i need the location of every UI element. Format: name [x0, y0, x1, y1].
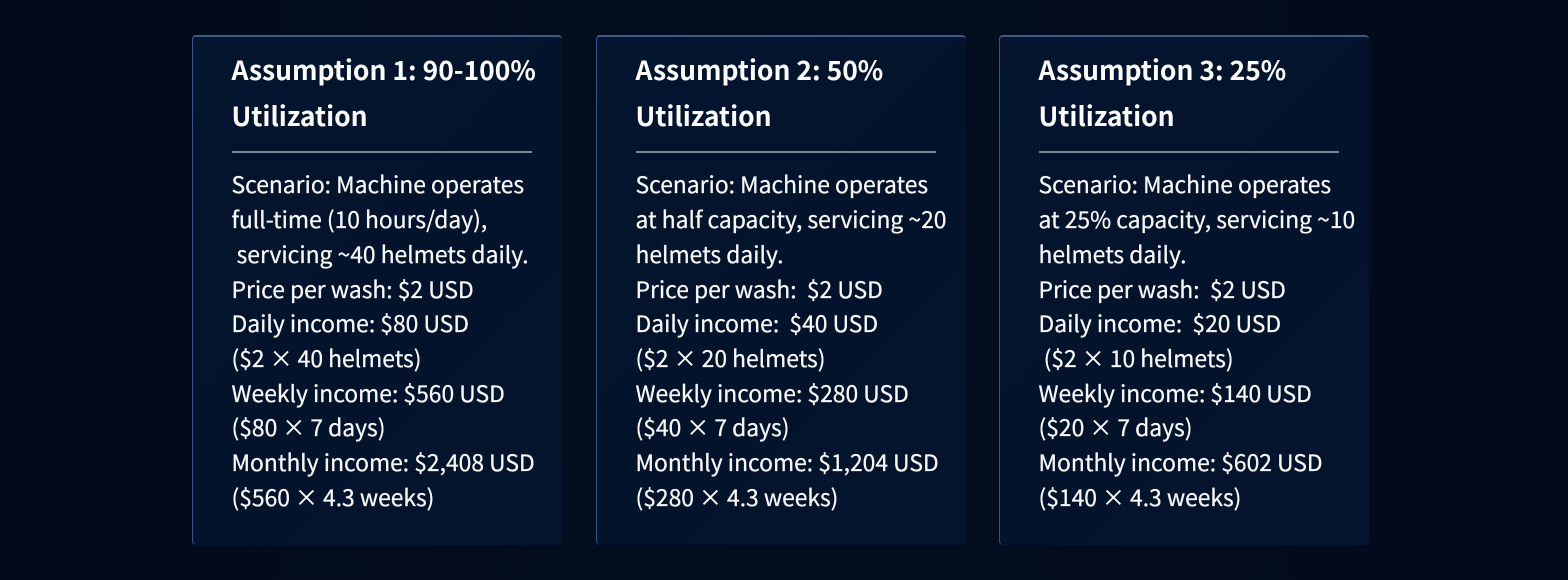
heading: assumption 1: Assumption 1: 90-100% — [232, 49, 536, 88]
heading: assumption 2 — [635, 49, 883, 134]
heading: assumption 3: Assumption 3: 25% — [1038, 49, 1286, 88]
heading: assumption 2: Assumption 2: 50% — [636, 49, 883, 88]
heading: assumption 3: Utilization — [1038, 95, 1175, 134]
panel: assumption 1 — [192, 35, 562, 545]
panel: assumption 2 — [596, 35, 966, 545]
text block: assumption 1 details: Scenario: Machine operates full-time (10 hours/day), servicing ~40 helmets daily. Price per wash: $2 USD Daily income: $80 USD ($2 × 40 helmets) Weekly income: $560 USD ($80 × 7 days) Monthly income: $2,408 USD ($560 × 4.3 weeks) — [232, 166, 535, 513]
heading: assumption 1: Utilization — [232, 95, 368, 134]
heading: assumption 2: Utilization — [636, 95, 772, 134]
text block: assumption 3 details: Scenario: Machine operates at 25% capacity, servicing ~10 helmets daily. Price per wash: $2 USD Daily income: $20 USD ($2 × 10 helmets) Weekly income: $140 USD ($20 × 7 days) Monthly income: $602 USD ($140 × 4.3 weeks) — [1038, 166, 1355, 513]
heading: assumption 3 — [1038, 49, 1286, 134]
heading: assumption 1 — [231, 49, 536, 134]
panel: assumption 3 — [999, 35, 1369, 545]
text block: assumption 2 details: Scenario: Machine operates at half capacity, servicing ~20 helmets daily. Price per wash: $2 USD Daily income: $40 USD ($2 × 20 helmets) Weekly income: $280 USD ($40 × 7 days) Monthly income: $1,204 USD ($280 × 4.3 weeks) — [636, 166, 946, 513]
